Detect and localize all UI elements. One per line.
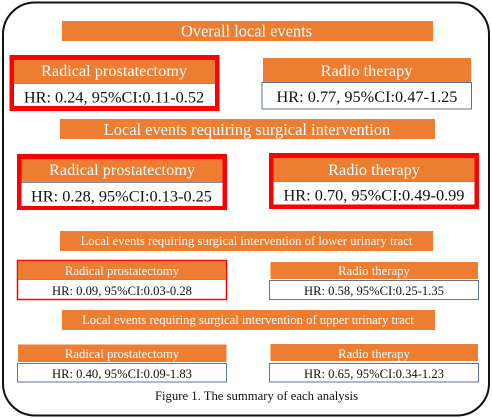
panel: lower tract radical prostatectomy: HR: 0.09, 95%CI:0.03-0.28 — [52, 284, 192, 298]
panel: upper tract radical prostatectomy: Radical prostatectomy — [65, 347, 180, 361]
panel: upper tract radio therapy: HR: 0.65, 95%CI:0.34-1.23 — [304, 367, 444, 381]
heading: overall local events — [62, 21, 433, 41]
panel: surgical radical prostatectomy: Radical prostatectomy — [49, 160, 196, 179]
heading: overall local events: Overall local events — [181, 22, 312, 40]
panel: overall radical prostatectomy: Radical prostatectomy — [41, 61, 188, 80]
heading: lower urinary tract — [60, 231, 433, 251]
panel: upper tract radical prostatectomy — [18, 344, 226, 382]
panel: lower tract radio therapy: HR: 0.58, 95%CI:0.25-1.35 — [304, 284, 444, 298]
panel: lower tract radical prostatectomy: Radical prostatectomy — [65, 264, 180, 278]
panel: upper tract radio therapy: Radio therapy — [338, 347, 411, 361]
caption: Figure 1. The summary of each analysis — [155, 389, 358, 403]
panel: lower tract radio therapy — [270, 262, 478, 300]
panel: overall radio therapy — [262, 58, 472, 109]
panel: lower tract radio therapy: Radio therapy — [338, 264, 411, 278]
panel: overall radical prostatectomy: HR: 0.24, 95%CI:0.11-0.52 — [24, 88, 204, 106]
panel: upper tract radical prostatectomy: HR: 0.40, 95%CI:0.09-1.83 — [52, 367, 192, 381]
heading: upper urinary tract — [62, 310, 435, 330]
heading: local events requiring surgical intervention: Local events requiring surgical intervention — [104, 120, 390, 139]
panel: lower tract radical prostatectomy — [18, 260, 226, 300]
panel: surgical radio therapy — [269, 153, 479, 209]
panel: overall radical prostatectomy — [10, 55, 220, 111]
panel: overall radio therapy: HR: 0.77, 95%CI:0.47-1.25 — [277, 87, 457, 106]
panel: surgical radio therapy: HR: 0.70, 95%CI:0.49-0.99 — [284, 186, 464, 204]
panel: surgical radical prostatectomy — [17, 154, 227, 210]
heading: upper urinary tract: Local events requiring surgical intervention of upper urinary tract — [82, 313, 414, 327]
heading: lower urinary tract: Local events requiring surgical intervention of lower urinary tract — [81, 234, 413, 248]
panel: overall radio therapy: Radio therapy — [321, 61, 413, 80]
panel: surgical radical prostatectomy: HR: 0.28, 95%CI:0.13-0.25 — [31, 186, 212, 206]
panel: surgical radio therapy: Radio therapy — [328, 160, 421, 179]
panel: upper tract radio therapy — [270, 344, 478, 382]
